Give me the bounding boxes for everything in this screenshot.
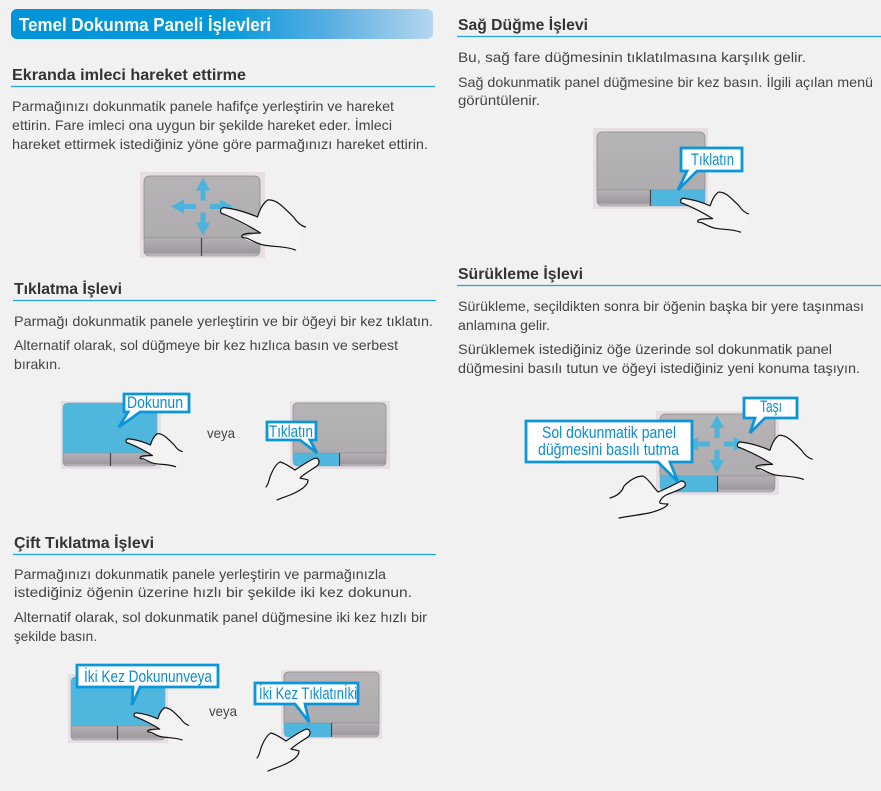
icon: right hand	[737, 435, 812, 479]
callout: İki Kez Dokununveya	[77, 665, 218, 705]
text block: right button instructions: görüntülenir.	[458, 93, 540, 108]
text block: double click instructions: Alternatif olarak, sol dokunmatik panel düğmesine iki kez hızlı bir	[14, 610, 427, 625]
callout: Tıklatın: Tıklatın	[269, 422, 313, 441]
text block: double click instructions	[14, 567, 427, 644]
text block: right button instructions: Bu, sağ fare düğmesinin tıklatılmasına karşılık gelir.	[458, 50, 806, 65]
callout: İki Kez Dokununveya: İki Kez Dokununveya	[84, 667, 212, 686]
text block: cursor instructions	[12, 99, 428, 152]
heading: Sağ Düğme İşlevi: Sağ Düğme İşlevi	[458, 16, 588, 34]
text block: right button instructions: Sağ dokunmatik panel düğmesine bir kez basın. İlgili açılan menü	[458, 75, 873, 90]
text block: click instructions	[14, 314, 433, 372]
icon: direction arrows	[685, 415, 747, 473]
heading: Ekranda imleci hareket ettirme: Ekranda imleci hareket ettirme	[12, 67, 246, 84]
illustration: click right button	[593, 128, 749, 232]
text block: double click instructions: istediğiniz öğenin üzerine hızlı bir şekilde iki kez dokunun.	[14, 585, 412, 600]
text block: drag instructions: anlamına gelir.	[458, 318, 550, 333]
text block: cursor instructions: Parmağınızı dokunmatik panele hafifçe yerleştirin ve hareket	[12, 99, 394, 114]
panel: drag function	[457, 265, 881, 518]
icon: left hand	[610, 476, 685, 518]
panel: right button function	[457, 16, 881, 232]
heading: Tıklatma İşlevi: Tıklatma İşlevi	[14, 280, 122, 298]
text block: drag instructions: Sürükleme, seçildikten sonra bir öğenin başka bir yere taşınması	[458, 299, 864, 314]
callout: Taşı: Taşı	[760, 397, 782, 416]
text block: drag instructions	[458, 299, 864, 376]
callout: Dokunun: Dokunun	[127, 393, 183, 412]
heading: Sürükleme İşlevi: Sürükleme İşlevi	[458, 265, 583, 283]
icon: hand	[220, 200, 306, 250]
text block: click instructions: Alternatif olarak, sol düğmeye bir kez hızlıca basın ve serbest	[14, 338, 398, 353]
illustration: double click left button	[255, 670, 382, 771]
icon: hand	[266, 458, 319, 500]
text block: right button instructions	[458, 50, 873, 108]
callout: left button hold	[526, 421, 692, 482]
icon: hand	[257, 729, 310, 771]
label: veya: veya	[207, 426, 235, 441]
callout: Tıklatın: Tıklatın	[691, 150, 734, 169]
callout: İki Kez Tıklatınİki: İki Kez Tıklatınİki	[259, 684, 357, 703]
text block: click instructions: bırakın.	[14, 357, 61, 372]
icon: direction arrows	[171, 178, 233, 236]
title banner: Temel Dokunma Paneli İşlevleri	[19, 15, 271, 35]
illustration: drag with two hands	[526, 397, 812, 518]
illustration: double tap on touchpad	[68, 665, 218, 743]
panel: click function	[13, 280, 436, 500]
icon: hand	[134, 708, 188, 740]
panel: double click function	[13, 534, 436, 771]
text block: click instructions: Parmağı dokunmatik panele yerleştirin ve bir öğeyi bir kez tıklatın.	[14, 314, 433, 329]
illustration: tap on touchpad	[61, 393, 189, 469]
text block: cursor instructions: hareket ettirmek istediğiniz yöne göre parmağınızı hareket ettirin.	[12, 137, 428, 152]
illustration: click left button	[266, 401, 390, 500]
text block: drag instructions: düğmesini basılı tutun ve öğeyi istediğiniz yeni konuma taşıyın.	[458, 361, 860, 376]
heading: Çift Tıklatma İşlevi: Çift Tıklatma İşlevi	[14, 534, 154, 552]
icon: hand	[126, 434, 182, 467]
illustration: touchpad with four arrows and hand	[140, 172, 306, 258]
text block: double click instructions: Parmağınızı dokunmatik panele yerleştirin ve parmağınızla	[14, 567, 386, 582]
callout: left button hold: Sol dokunmatik panel	[542, 423, 676, 442]
label: veya: veya	[209, 704, 237, 719]
text block: double click instructions: şekilde basın.	[14, 629, 97, 644]
callout: Taşı	[744, 397, 797, 433]
icon: hand	[681, 192, 749, 232]
callout: Tıklatın	[678, 148, 742, 190]
title banner	[11, 9, 433, 39]
panel: moving the cursor	[11, 67, 435, 258]
text block: drag instructions: Sürüklemek istediğiniz öğe üzerinde sol dokunmatik panel	[458, 342, 832, 357]
callout: left button hold: düğmesini basılı tutma	[538, 440, 679, 459]
text block: cursor instructions: ettirin. Fare imleci ona uygun bir şekilde hareket eder. İmleci	[12, 118, 392, 133]
